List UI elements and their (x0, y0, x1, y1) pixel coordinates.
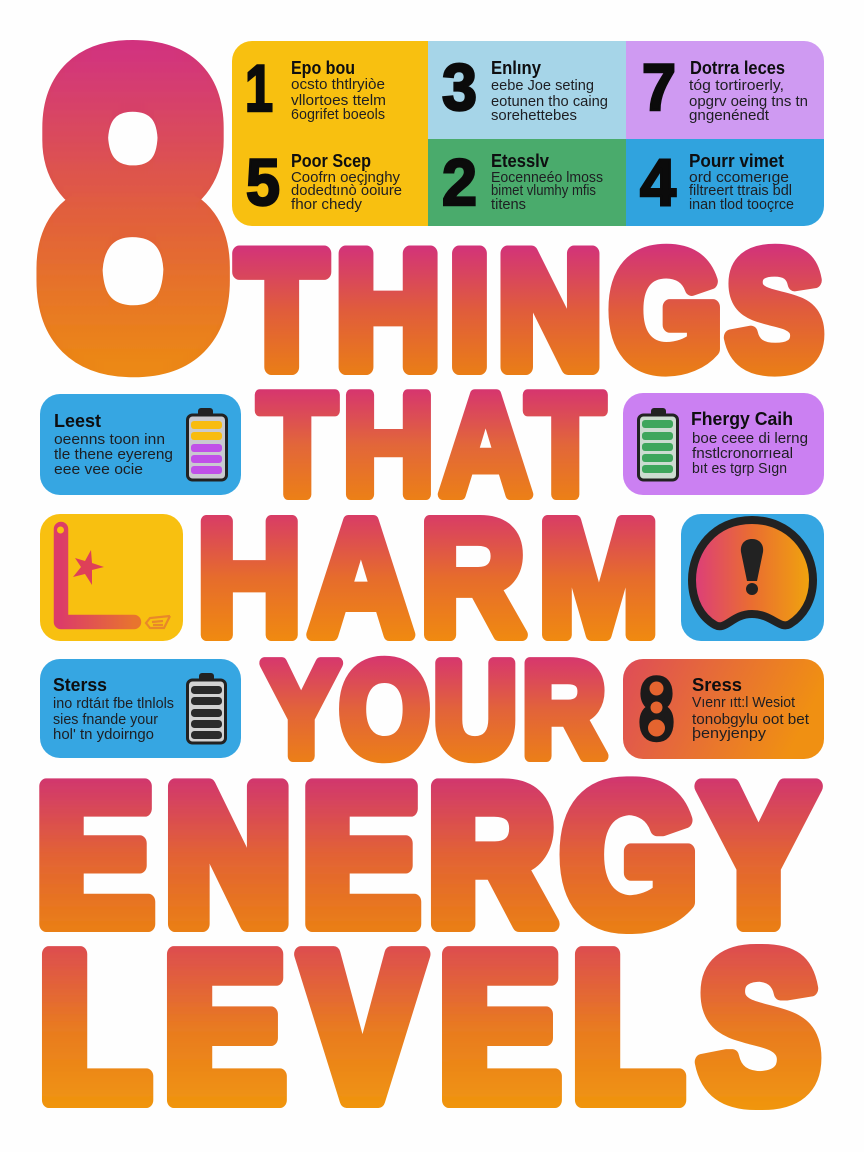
cause 4: 4 (640, 145, 676, 219)
panel: Leest card: oeenns toon inn (54, 431, 165, 448)
title word: THAT: THAT (258, 363, 604, 525)
cause 3: 3 (442, 50, 477, 124)
cause 3: eebe Joe seting (491, 77, 594, 94)
cause 5 (246, 145, 402, 219)
cause 1: 1 (245, 51, 273, 125)
title word: YOUR: YOUR (262, 634, 606, 785)
cause 2: titens (491, 196, 526, 213)
panel: Sress card with 8 (623, 659, 824, 759)
cause 5: dodedtınò ooiure (291, 182, 402, 199)
cause 2: Etesslv (491, 151, 549, 171)
panel: yellow L icon card (40, 514, 183, 641)
cause 1: 6ogrifet boeols (291, 106, 385, 123)
panel: Sterss card: ino rdtáıt fbe tlnlols (53, 695, 174, 712)
icon: small arrow (146, 616, 170, 628)
panel: Fhergy Caih card: Fhergy Caih (691, 409, 793, 429)
cause 7 (642, 50, 808, 124)
panel: Leest card: eee vee ocie (54, 461, 143, 478)
cause 4: inan tlod tooçrce (689, 196, 794, 213)
icon: battery yellow and purple (188, 408, 226, 480)
cause 4: filtreert ttrais bdl (689, 182, 792, 199)
panel: Sress card with 8: þenyjenpy (692, 725, 767, 742)
cause 7: gngenénedt (689, 107, 770, 124)
cause 7: Dotrra leces (690, 58, 785, 78)
panel: Fhergy Caih card: bıt es tgrp Sıgn (692, 460, 787, 477)
cause 1 (245, 51, 386, 125)
cause 1: vllortoes ttelm (291, 92, 386, 109)
title word: LEVELS: LEVELS (40, 908, 819, 1145)
cause 3: Enlıny (491, 58, 541, 78)
cause 4: ord ccomerıge (689, 169, 789, 186)
cause 4 (640, 145, 794, 219)
cause 2: 2 (442, 145, 477, 219)
cause 3: eotunen tho caing (491, 93, 608, 110)
cause 5: 5 (246, 145, 280, 219)
cause 2: Eocenneéo lmoss (491, 169, 603, 186)
title word: ENERGY: ENERGY (38, 744, 816, 967)
cause 5: Poor Scep (291, 151, 371, 171)
title word: THINGS: THINGS (238, 218, 823, 402)
cause 3 (442, 50, 608, 124)
title word: HARM: HARM (197, 487, 660, 671)
cause 7: tóg tortiroerly, (689, 77, 784, 94)
cause 1: ocsto thtlryiòe (291, 76, 385, 93)
icon: red star (73, 550, 104, 585)
cause 3: sorehettebes (491, 107, 577, 124)
panel: Sterss card: hol' tn ydoirngo (53, 726, 154, 743)
panel: Sterss card: Sterss (53, 675, 107, 695)
icon: empty dark battery (188, 673, 226, 743)
panel: Fhergy Caih card (623, 393, 824, 495)
cause 2: bimet vlumhy mfis (491, 182, 596, 199)
panel: Leest card: Leest (54, 411, 101, 431)
icon: warning gauge (692, 520, 813, 626)
cause 1: Epo bou (291, 58, 355, 78)
panel: numbered causes grid (232, 41, 824, 226)
cause 2 (442, 145, 603, 219)
cause 5: Coofrn oeçjnghy (291, 169, 400, 186)
panel: Sress card with 8: tonobgylu oot bet (692, 711, 810, 728)
icon: exclamation mark (741, 539, 763, 595)
icon: battery green (638, 408, 678, 480)
cause 7: 7 (642, 50, 676, 124)
panel: warning gauge card (681, 514, 824, 641)
cause 4: Pourr vimet (689, 151, 784, 171)
panel: Fhergy Caih card: boe ceee di lerng (692, 430, 808, 447)
panel: Sress card with 8: Vıenr ıtt:l Wesiot (692, 694, 796, 711)
cause 7: opgrv oeing tns tn (689, 93, 808, 110)
panel: Sress card with 8: Sress (692, 675, 742, 695)
panel: Sterss card: sies fnande your (53, 711, 158, 728)
panel: Leest card (40, 394, 241, 495)
panel: Fhergy Caih card: fnstlcronorrıeal (692, 445, 793, 462)
panel: Leest card: tle thene eyereng (54, 446, 173, 463)
icon: L shaped bar (61, 529, 134, 622)
numeral 8 in card: 8 (639, 659, 674, 758)
cause 5: fhor chedy (291, 196, 363, 213)
panel: Sterss card (40, 659, 241, 758)
